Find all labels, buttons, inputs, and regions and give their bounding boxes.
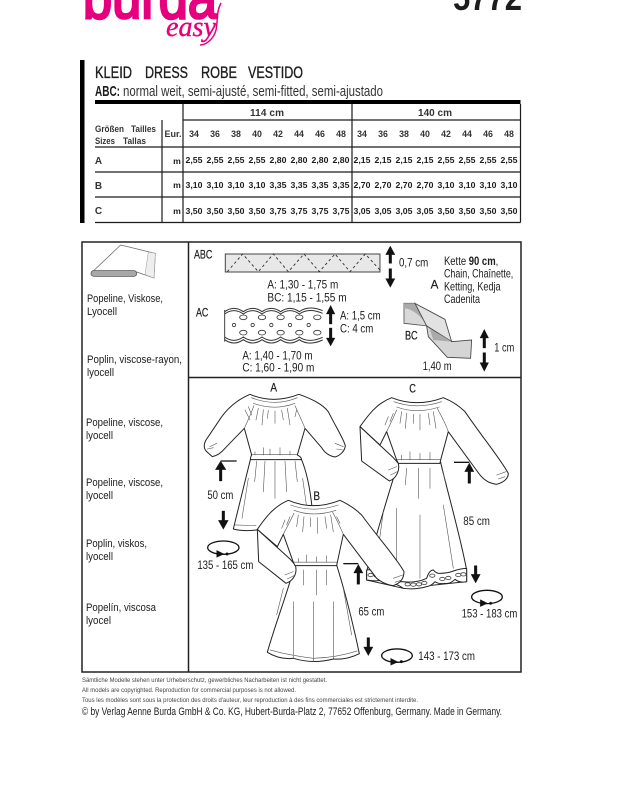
length marker B: [343, 564, 384, 656]
footer copyright: [82, 677, 502, 718]
table header: size labels: Größen: [95, 124, 124, 134]
table row B: 3,35: [291, 180, 308, 190]
table header: sizes: 48: [336, 129, 346, 139]
table row A: 2,55: [438, 155, 455, 165]
table row C: 3,75: [291, 206, 308, 216]
table row C: C: [95, 206, 102, 217]
length marker C: 85 cm: [463, 514, 490, 528]
hem width C: 153 - 183 cm: [462, 607, 517, 621]
table row C: 3,50: [459, 206, 476, 216]
table header: sizes: 36: [378, 129, 388, 139]
chain label: Kette 90 cm,: [444, 255, 498, 268]
table header: sizes: 38: [399, 129, 409, 139]
table row B: 3,10: [459, 180, 476, 190]
panel: fabric recommendations: lyocell: [87, 367, 114, 379]
table row C: [95, 206, 518, 217]
table row C: 3,50: [249, 206, 266, 216]
hem width C: [462, 590, 517, 621]
arrow: 0,7 cm height: 0,7 cm: [399, 257, 428, 270]
table row A: [95, 155, 518, 167]
table header: sizes: 48: [504, 129, 514, 139]
table row A: 2,55: [186, 155, 203, 165]
table row A: 2,55: [459, 155, 476, 165]
dress labels: C: [409, 381, 416, 395]
table header: sizes: 44: [462, 129, 472, 139]
panel: fabric recommendations: Poplin, viskos,: [86, 538, 147, 550]
table header: sizes: [189, 129, 514, 139]
BC ribbon: [404, 303, 472, 373]
table row C: 3,75: [270, 206, 287, 216]
table row A: 2,55: [501, 155, 518, 165]
table row B: 3,10: [228, 180, 245, 190]
main panel frame: [82, 242, 521, 672]
table row A: 2,15: [354, 155, 371, 165]
table row A: 2,55: [228, 155, 245, 165]
subtitle: normal weit, semi-ajusté, semi-fitted, semi-ajustado: [123, 83, 383, 100]
table header: fabric widths: 114 cm: [250, 108, 284, 119]
panel: fabric recommendations: lyocel: [86, 615, 111, 627]
chain label: [431, 255, 513, 306]
panel: fabric recommendations: [86, 245, 182, 627]
table header: fabric widths: [250, 108, 452, 119]
table row A: A: [95, 156, 102, 167]
icon: folded fabric: [91, 245, 155, 278]
BC ribbon: 1,40 m: [423, 360, 452, 373]
panel: fabric recommendations: Lyocell: [87, 306, 117, 318]
table row B: [95, 180, 518, 192]
table row A: 2,55: [207, 155, 224, 165]
table row A: 2,15: [417, 155, 434, 165]
footer copyright: All models are copyrighted. Reproduction for commercial purposes is not allowed.: [82, 687, 296, 694]
panel: notions and trims: [194, 246, 514, 375]
table header: size labels: Tailles: [131, 124, 156, 134]
table row B: 2,70: [417, 180, 434, 190]
table row B: 3,35: [270, 180, 287, 190]
table row A: 2,80: [270, 155, 287, 165]
table row B: 3,35: [312, 180, 329, 190]
panel: fabric recommendations: Popeline, viscose,: [86, 417, 163, 429]
table header: size labels: Sizes: [95, 136, 115, 146]
AC lace trim: [196, 307, 323, 375]
table header: sizes: 40: [420, 129, 430, 139]
table row B: B: [95, 181, 102, 192]
ABC tape: A: 1,30 - 1,75 m: [267, 279, 338, 292]
hem width B: [382, 649, 475, 665]
table header: size labels: [95, 124, 182, 146]
panel: fabric recommendations: Poplin, viscose-rayon,: [87, 354, 182, 366]
chain label: A: [431, 278, 439, 291]
table row C: 3,50: [438, 206, 455, 216]
panel: fabric recommendations: Popelín, viscosa: [86, 602, 157, 614]
dress A: [204, 394, 345, 531]
title: VESTIDO: [248, 63, 303, 82]
panel: fabric recommendations: Popeline, Viskose,: [87, 293, 163, 305]
arrow: lace width: C: 4 cm: [340, 322, 373, 335]
panel: fabric recommendations: Popeline, viscose,: [86, 477, 163, 489]
table row C: 3,05: [396, 206, 413, 216]
table header: fabric widths: 140 cm: [418, 108, 452, 119]
hem width B: 143 - 173 cm: [418, 649, 475, 663]
dress labels: B: [313, 489, 320, 503]
ABC tape: BC: 1,15 - 1,55 m: [267, 291, 347, 304]
panel: fabric recommendations: lyocell: [86, 490, 113, 502]
table row C: 3,50: [480, 206, 497, 216]
ABC tape: [194, 248, 380, 304]
table header: sizes: 42: [441, 129, 451, 139]
table header: sizes: 34: [357, 129, 367, 139]
dress labels: [270, 381, 416, 503]
table row B: 3,10: [186, 180, 203, 190]
table row C: 3,50: [228, 206, 245, 216]
table header: sizes: 46: [315, 129, 325, 139]
table header: sizes: 44: [294, 129, 304, 139]
table row C: 3,75: [333, 206, 350, 216]
dress B: [257, 500, 404, 662]
table header: sizes: 46: [483, 129, 493, 139]
table header: sizes: 42: [273, 129, 283, 139]
hem width A: [197, 541, 253, 572]
table row A: 2,55: [249, 155, 266, 165]
table row B: 3,10: [249, 180, 266, 190]
AC lace trim: A: 1,40 - 1,70 m: [242, 349, 313, 362]
table row B: 2,70: [354, 180, 371, 190]
table row B: 3,10: [438, 180, 455, 190]
subtitle: ABC:: [95, 83, 120, 100]
yardage table: [95, 100, 520, 222]
table row A: 2,15: [375, 155, 392, 165]
dress C: [360, 398, 508, 589]
table row C: 3,05: [375, 206, 392, 216]
table header: size labels: Eur.: [164, 129, 182, 139]
panel: fabric recommendations: lyocell: [86, 551, 113, 563]
length marker A: 50 cm: [207, 488, 233, 502]
footer copyright: Sämtliche Modelle stehen unter Urheberschutz, gewerbliches Nacharbeiten ist nicht gestattet.: [82, 677, 327, 684]
title: KLEID: [95, 63, 132, 82]
table row B: 3,10: [501, 180, 518, 190]
panel: dress illustrations: [197, 381, 517, 665]
table row A: m: [173, 156, 181, 166]
table row C: 3,05: [417, 206, 434, 216]
table row A: 2,15: [396, 155, 413, 165]
table header: sizes: 36: [210, 129, 220, 139]
dress labels: A: [270, 381, 277, 395]
title: ROBE: [201, 63, 237, 82]
AC lace trim: C: 1,60 - 1,90 m: [242, 362, 314, 375]
table row C: 3,50: [501, 206, 518, 216]
arrow: ribbon width: 1 cm: [494, 342, 514, 355]
arrow: ribbon width: [480, 329, 514, 371]
length marker B: 65 cm: [358, 605, 384, 619]
table row C: 3,50: [186, 206, 203, 216]
table row C: 3,75: [312, 206, 329, 216]
chain label: Ketting, Kedja: [444, 280, 501, 293]
table row A: 2,55: [480, 155, 497, 165]
table row B: 3,10: [207, 180, 224, 190]
hem width A: 135 - 165 cm: [197, 558, 253, 572]
table header: sizes: 38: [231, 129, 241, 139]
table row B: 3,35: [333, 180, 350, 190]
logo: burda easy: easy: [166, 12, 217, 43]
chain label: Cadenita: [444, 293, 480, 306]
table row B: 2,70: [375, 180, 392, 190]
panel: fabric recommendations: lyocell: [86, 430, 113, 442]
arrow: lace width: [326, 305, 381, 346]
table header: sizes: 34: [189, 129, 199, 139]
ABC tape: ABC: [194, 248, 212, 261]
table header: sizes: 40: [252, 129, 262, 139]
footer copyright: © by Verlag Aenne Burda GmbH & Co. KG, Hubert-Burda-Platz 2, 77652 Offenburg, Germany. Made in Germany.: [82, 706, 502, 718]
title: [95, 63, 303, 82]
length marker C: [454, 462, 490, 583]
chain label: Chain, Chaînette,: [444, 268, 513, 281]
table row C: 3,50: [207, 206, 224, 216]
footer copyright: Tous les modèles sont sous la protection des droits d'auteur, leur reproduction à des fins commerciales est strictement interdite.: [82, 697, 418, 704]
AC lace trim: AC: [196, 307, 208, 320]
table row A: 2,80: [333, 155, 350, 165]
table row B: 3,10: [480, 180, 497, 190]
table row B: m: [173, 180, 181, 190]
logo: burda easy: [83, 0, 221, 45]
table row A: 2,80: [312, 155, 329, 165]
table header: size labels: Tallas: [123, 136, 146, 146]
title: DRESS: [145, 63, 188, 82]
BC ribbon: BC: [405, 329, 418, 342]
table row B: 2,70: [396, 180, 413, 190]
left vertical bar: [80, 60, 84, 223]
length marker A: [207, 461, 237, 529]
table row A: 2,80: [291, 155, 308, 165]
table row C: m: [173, 206, 181, 216]
table row C: 3,05: [354, 206, 371, 216]
arrow: 0,7 cm height: [386, 246, 428, 287]
arrow: lace width: A: 1,5 cm: [340, 309, 381, 322]
